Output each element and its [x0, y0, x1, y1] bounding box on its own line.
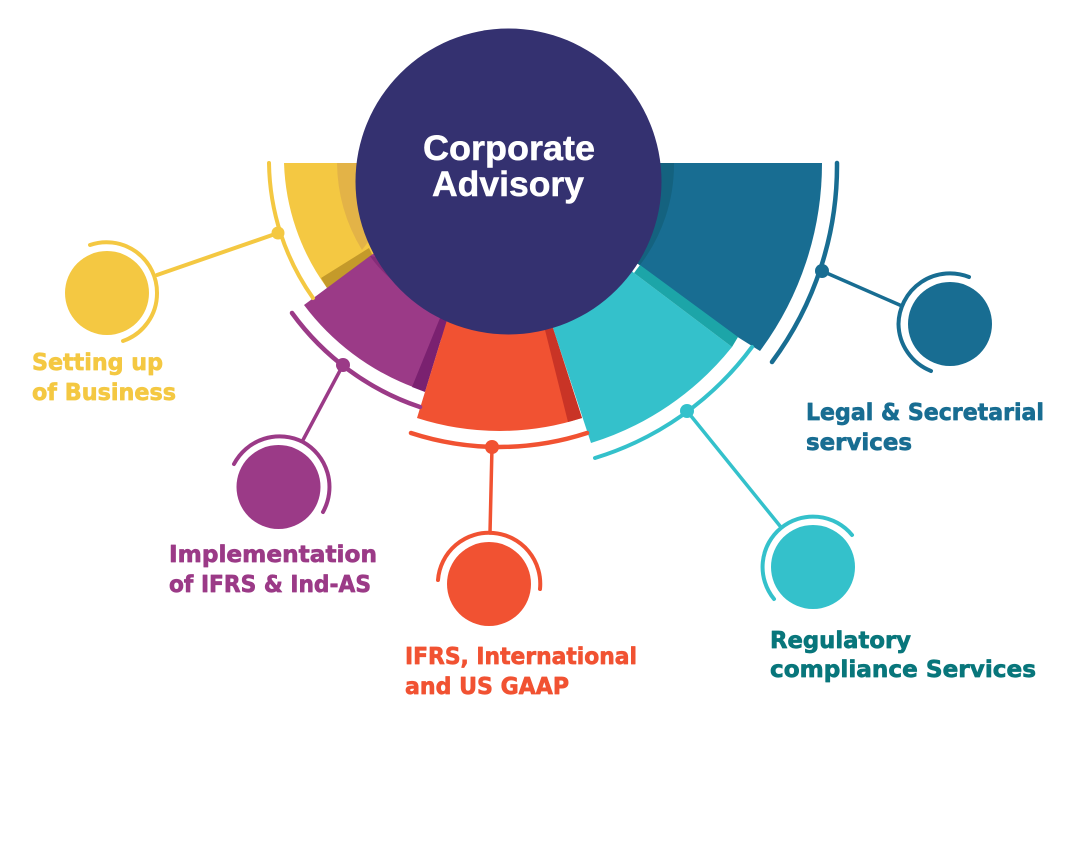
outer arc and connector: yellow: [157, 163, 313, 298]
icon: yellow node: [65, 242, 157, 341]
label: Legal and Secretarial services: services: [806, 430, 912, 456]
label: Regulatory compliance Services: [770, 628, 1036, 683]
outer arc and connector: orange: [411, 433, 587, 533]
icon: orange node: [438, 533, 540, 626]
label: Setting up of Business: Setting up: [32, 350, 163, 376]
fan segment: setting up of business (yellow): [284, 163, 508, 288]
label: Regulatory compliance Services: compliance Services: [770, 657, 1036, 683]
fan segment: legal and secretarial (teal): [508, 163, 822, 351]
label: Legal and Secretarial services: Legal & Secretarial: [806, 400, 1044, 426]
title: Corporate Advisory: Corporate: [423, 129, 595, 168]
label: Setting up of Business: [32, 350, 176, 406]
label: Setting up of Business: of Business: [32, 380, 176, 406]
icon: purple node: [234, 436, 329, 529]
outer arc and connector: teal: [772, 163, 902, 362]
label: IFRS, International and US GAAP: IFRS, International: [405, 644, 637, 670]
central circle: [356, 28, 662, 334]
label: Implementation of IFRS and Ind-AS: Implementation: [169, 542, 377, 568]
label: Implementation of IFRS and Ind-AS: of IFRS & Ind-AS: [169, 572, 371, 598]
label: Implementation of IFRS and Ind-AS: [169, 542, 377, 598]
icon: teal node: [898, 273, 992, 371]
label: IFRS, International and US GAAP: [405, 644, 637, 700]
title: Corporate Advisory: Advisory: [432, 165, 585, 204]
icon: cyan node: [763, 517, 855, 609]
outer arc and connector: purple: [292, 313, 420, 440]
outer arc and connector: cyan: [595, 347, 780, 526]
label: IFRS, International and US GAAP: and US GAAP: [405, 674, 569, 700]
label: Legal and Secretarial services: [806, 400, 1044, 456]
label: Regulatory compliance Services: Regulatory: [770, 628, 911, 654]
fan segment: regulatory compliance (cyan): [508, 163, 738, 443]
fan segment: implementation of IFRS (purple): [304, 163, 508, 392]
title: Corporate Advisory: [423, 129, 595, 204]
fan segment: IFRS, International and US GAAP (orange): [417, 163, 582, 431]
